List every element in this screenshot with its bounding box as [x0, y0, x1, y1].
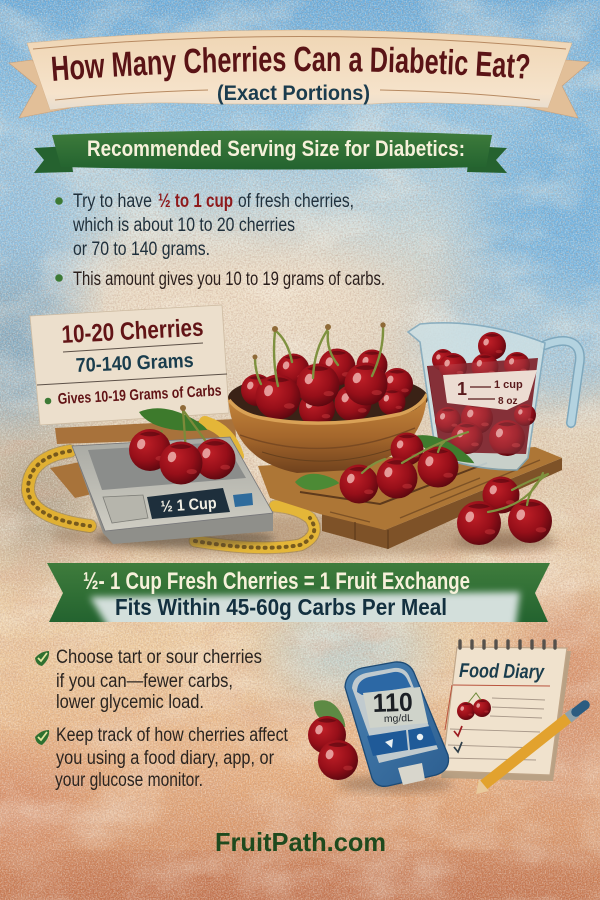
cup markings: 1	[457, 379, 467, 399]
sign text: 10-20 Cherries	[61, 314, 204, 349]
meter screen	[363, 687, 428, 728]
measuring cup: 1 cup	[494, 379, 523, 391]
meter screen: mg/dL	[384, 713, 414, 725]
fruit exchange ribbon	[47, 563, 550, 622]
tip 2: you using a food diary, app, or	[56, 748, 275, 769]
tips list	[35, 647, 289, 791]
subtitle: (Exact Portions)	[217, 82, 370, 105]
loose cherries	[453, 473, 557, 550]
cherries on board	[340, 432, 468, 504]
tip 1: lower glycemic load.	[56, 692, 204, 713]
meter cherries and leaf	[308, 695, 358, 780]
line one: ½- 1 Cup Fresh Cherries = 1 Fruit Exchange	[83, 568, 470, 595]
diary title: Food Diary	[459, 660, 545, 683]
leaves on board	[294, 430, 478, 492]
bullet 1	[55, 191, 354, 260]
illustration: sign, scale, bowl, cup, board	[28, 305, 580, 557]
food diary notebook	[441, 641, 571, 781]
tip 2: Keep track of how cherries affect	[56, 725, 289, 746]
website: FruitPath.com	[215, 827, 386, 857]
meter screen: 110	[372, 687, 413, 718]
pencil	[476, 705, 585, 794]
bullet 1: which is about 10 to 20 cherries	[72, 215, 295, 236]
pale lower band	[90, 592, 520, 630]
title: How Many Cherries Can a Diabetic Eat?	[52, 46, 530, 82]
tip 2: your glucose monitor.	[55, 770, 203, 791]
glucose meter	[337, 662, 453, 792]
green heading ribbon	[34, 130, 507, 173]
leaves on scale	[137, 404, 210, 435]
measuring tape	[28, 422, 314, 548]
ribbon tails	[9, 60, 590, 118]
diary checks	[454, 726, 462, 736]
cherries in bowl	[228, 322, 428, 427]
wood behind scale	[50, 462, 100, 498]
spiral binding	[460, 641, 555, 648]
measuring cup: 8 oz	[498, 396, 517, 407]
digital scale	[72, 437, 275, 547]
wooden stand	[55, 419, 236, 444]
bullet 1: Try to have	[73, 191, 152, 212]
bullet 1: or 70 to 140 grams.	[73, 239, 210, 260]
sign: 70-140 Grams	[75, 350, 194, 377]
sign: Gives 10-19 Grams of Carbs	[57, 382, 222, 408]
measuring cup	[408, 323, 580, 470]
wooden bowl	[228, 392, 427, 473]
bullet list: serving size	[55, 191, 385, 290]
bullet 1: of fresh cherries,	[238, 191, 354, 212]
bullet 2: This amount gives you 10 to 19 grams of carbs.	[73, 269, 385, 290]
sign	[30, 305, 229, 425]
tip 2	[35, 725, 289, 791]
tip 1: if you can—fewer carbs,	[56, 671, 233, 692]
title ribbon	[8, 30, 591, 118]
scale display text: ½ 1 Cup	[160, 495, 217, 516]
cherries on scale	[129, 405, 236, 484]
diary cherries	[457, 693, 491, 720]
ribbon body	[27, 30, 572, 110]
tip 1	[35, 647, 262, 713]
bullet 1: ½ to 1 cup	[158, 191, 233, 212]
cutting board	[258, 447, 562, 549]
ground shadow	[50, 513, 550, 557]
tip 1: Choose tart or sour cherries	[56, 647, 262, 668]
heading text: Recommended Serving Size for Diabetics:	[87, 136, 465, 161]
line two: Fits Within 45-60g Carbs Per Meal	[115, 594, 447, 620]
